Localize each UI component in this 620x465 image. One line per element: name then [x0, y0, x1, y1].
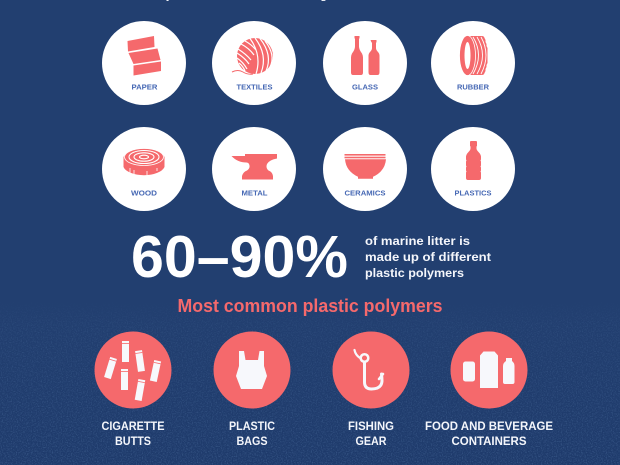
label: METAL [242, 188, 268, 198]
label: FOOD AND BEVERAGE [425, 419, 553, 433]
material: plastics [431, 127, 515, 211]
statistic description: plastic polymers [365, 266, 464, 280]
label: GEAR [356, 434, 387, 448]
label [348, 419, 394, 448]
label: PLASTICS [454, 188, 492, 198]
icon: cigarette butts [104, 341, 161, 401]
label: BAGS [236, 434, 268, 448]
label: FISHING [348, 419, 394, 433]
icon: anvil [232, 154, 277, 180]
icon: bowl [344, 154, 386, 179]
material: wood [102, 127, 186, 211]
label: WOOD [131, 188, 158, 198]
icon: yarn ball [232, 38, 273, 74]
label: TEXTILES [236, 82, 273, 92]
background [0, 316, 620, 465]
label: CIGARETTE [102, 419, 164, 433]
icon: bottles [351, 36, 380, 75]
icon: plastic bottle [466, 141, 481, 180]
item: fishing gear [332, 332, 410, 448]
label [102, 419, 164, 448]
label: PAPER [132, 82, 158, 92]
statistic description: made up of different [365, 250, 491, 264]
label: BUTTS [115, 434, 151, 448]
icon: tyre [460, 36, 488, 76]
icon: containers [463, 352, 514, 388]
label [425, 419, 553, 448]
material: textiles [212, 21, 296, 105]
label: RUBBER [457, 82, 490, 92]
material: glass [323, 21, 407, 105]
label: CERAMICS [344, 188, 386, 198]
label: PLASTIC [229, 419, 275, 433]
item: plastic bags [214, 332, 290, 448]
item: food and beverage containers [425, 332, 553, 448]
material: ceramics [323, 127, 407, 211]
material: paper [102, 21, 186, 105]
icon: folded paper [128, 36, 161, 76]
icon: log slice [124, 148, 164, 175]
label [229, 419, 275, 448]
cropped intro text at top edge [166, 0, 327, 2]
item: cigarette butts [94, 332, 172, 448]
statistic description [365, 234, 491, 280]
label: GLASS [352, 82, 378, 92]
material: metal [212, 127, 296, 211]
big statistic: 60–90% [131, 224, 348, 290]
statistic description: of marine litter is [365, 234, 470, 248]
label: CONTAINERS [452, 434, 526, 448]
material: rubber [431, 21, 515, 105]
heading: most common plastic polymers: Most common plastic polymers [178, 296, 442, 316]
icon: fishing hook [354, 350, 383, 389]
icon: plastic bag [236, 351, 267, 389]
